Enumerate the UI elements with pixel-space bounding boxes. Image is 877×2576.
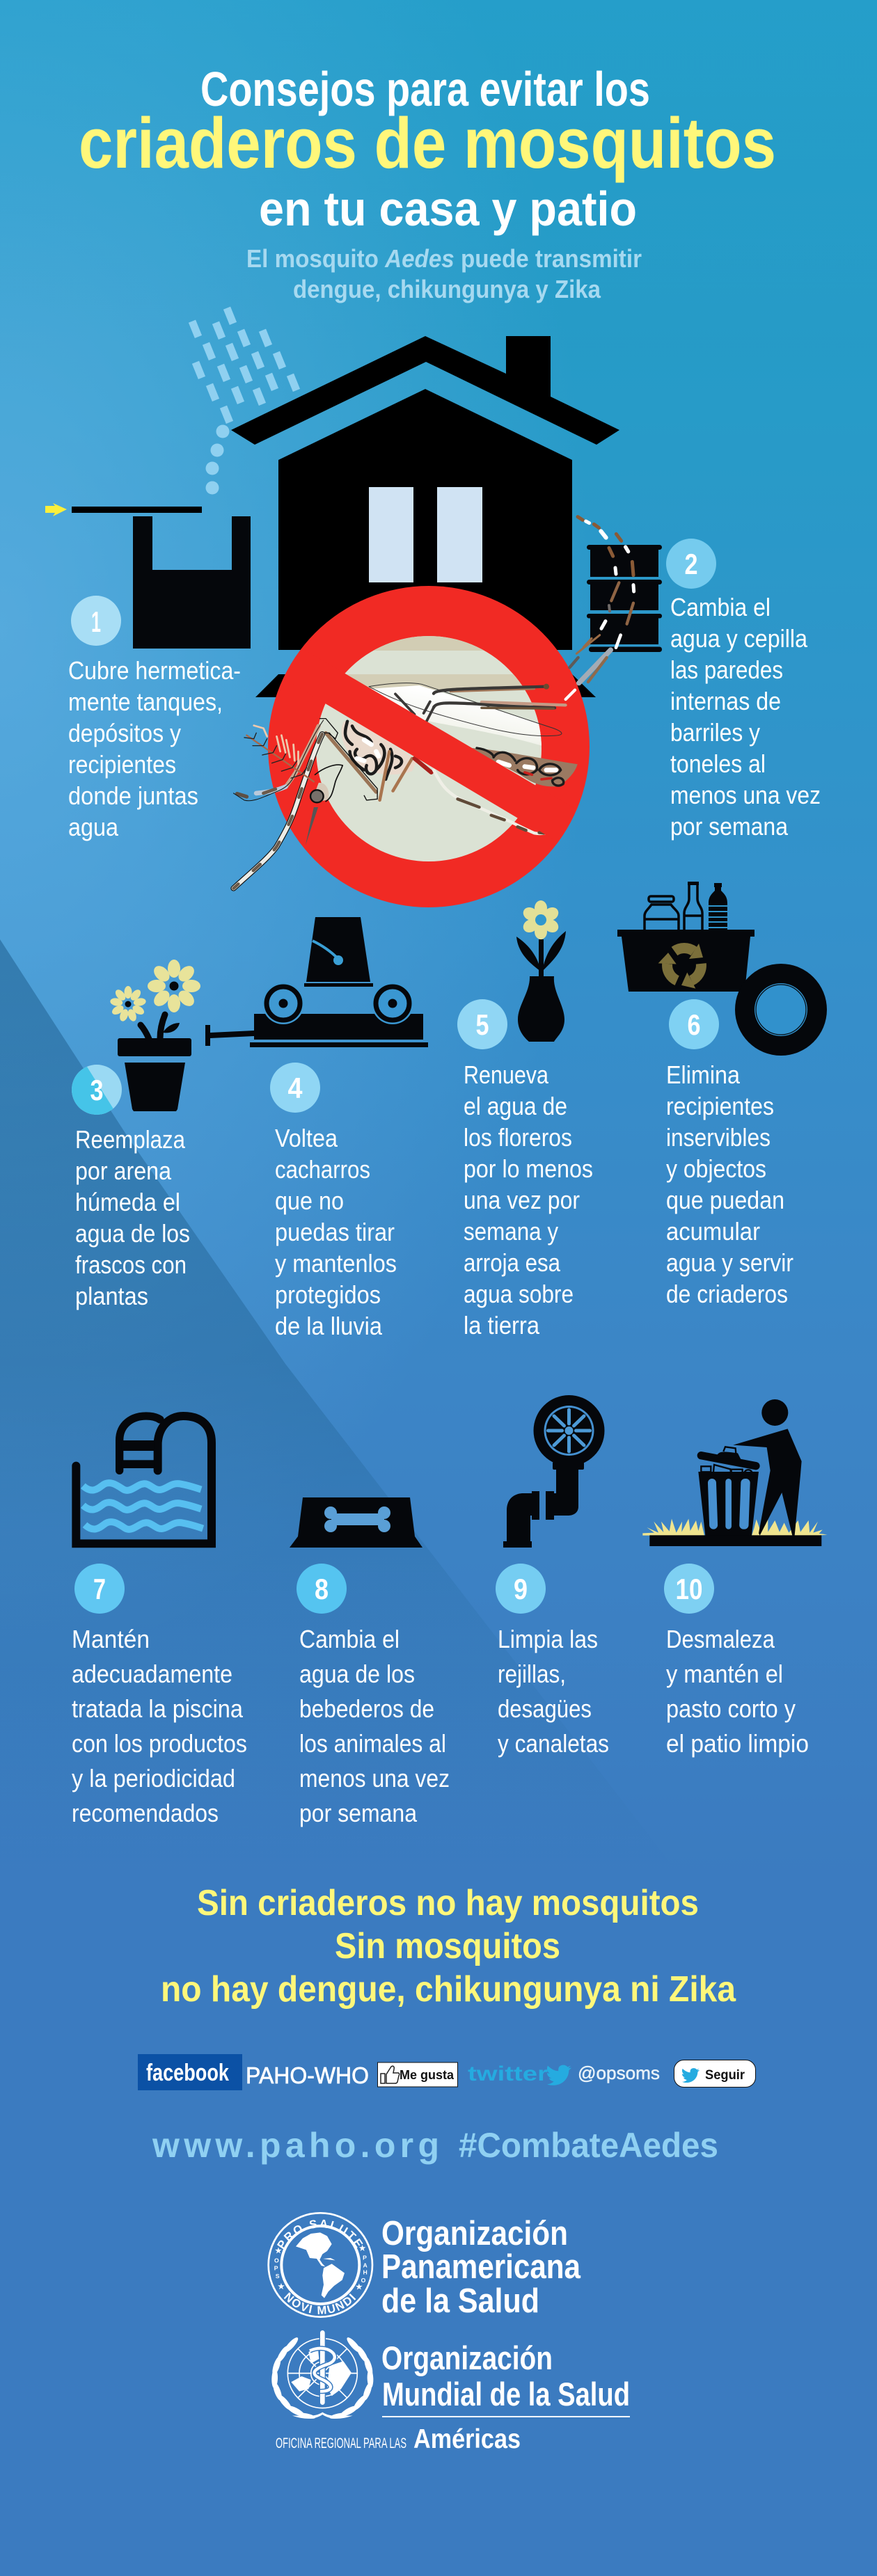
like button: Me gusta	[400, 2068, 455, 2082]
text 7: y la periodicidad	[72, 1764, 235, 1792]
badge 5: 5	[476, 1008, 489, 1041]
icon: flower vase	[516, 900, 566, 1042]
text 6: recipientes	[666, 1092, 774, 1120]
text 4	[275, 1124, 397, 1340]
text 7: con los productos	[72, 1729, 247, 1758]
follow button	[674, 2060, 756, 2088]
icon: barrel	[587, 545, 662, 652]
badge 3	[72, 1065, 122, 1115]
logo: PAHO emblem: PRO SALUTE	[277, 2220, 363, 2249]
logo: PAHO emblem: O	[361, 2277, 366, 2284]
title	[79, 62, 776, 236]
text 8: bebederos de	[299, 1694, 434, 1723]
step 6	[666, 999, 793, 1308]
step 9	[496, 1564, 609, 1758]
text 3	[75, 1125, 190, 1310]
badge 8: 8	[315, 1573, 329, 1605]
text 3: agua de los	[75, 1219, 190, 1248]
logo: PAHO emblem: H	[363, 2269, 368, 2276]
logo: WHO name: Organización	[381, 2339, 553, 2376]
text 4: de la lluvia	[275, 1312, 383, 1340]
text 3: frascos con	[75, 1250, 187, 1279]
text 10: Desmaleza	[666, 1625, 775, 1653]
icon: prohibition sign with mosquito	[233, 586, 590, 907]
text 4: y mantenlos	[275, 1249, 397, 1278]
facebook badge: facebook	[146, 2060, 229, 2086]
mosquito legs over barrel	[566, 517, 634, 699]
logo: WHO name: OFICINA REGIONAL PARA LAS	[276, 2435, 406, 2451]
step 10	[664, 1564, 809, 1758]
text 7: Mantén	[72, 1625, 150, 1653]
badge 6	[669, 999, 719, 1049]
text 5: semana y	[464, 1217, 558, 1246]
text 5: por lo menos	[464, 1154, 593, 1183]
text 3: Reemplaza	[75, 1125, 186, 1154]
icon: pet water bowl	[290, 1497, 422, 1548]
twitter account: @opsoms	[578, 2062, 660, 2083]
badge 1: 1	[91, 605, 101, 638]
title: Consejos para evitar los	[200, 62, 650, 116]
closing slogan	[161, 1883, 736, 2010]
logo: PAHO name: de la Salud	[381, 2282, 539, 2320]
text 5	[464, 1060, 593, 1339]
text 7	[72, 1625, 247, 1827]
text 6: acumular	[666, 1217, 760, 1246]
badge 2: 2	[685, 548, 697, 580]
badge 7	[74, 1564, 125, 1614]
text 8: por semana	[299, 1799, 418, 1827]
website and hashtag	[152, 2126, 718, 2165]
text 2: internas de	[670, 687, 781, 715]
logo: PAHO emblem: ★	[358, 2243, 366, 2253]
logo: PAHO emblem: ★	[355, 2282, 363, 2292]
text 4: cacharros	[275, 1155, 370, 1184]
text 4: que no	[275, 1186, 344, 1215]
badge 8	[297, 1564, 347, 1614]
badge 3: 3	[90, 1074, 103, 1106]
social media row	[138, 2054, 756, 2090]
icon: house	[231, 336, 619, 697]
text 2: menos una vez	[670, 781, 821, 809]
badge 2	[666, 539, 716, 589]
subtitle	[246, 244, 642, 303]
step 2	[666, 539, 821, 841]
logo: WHO name: Américas	[413, 2424, 521, 2454]
logo: PAHO name: Panamericana	[381, 2248, 581, 2286]
text 5: Renueva	[464, 1060, 549, 1089]
text 6	[666, 1060, 793, 1308]
text 6: agua y servir	[666, 1248, 793, 1277]
logo: PAHO emblem: P	[274, 2265, 278, 2272]
logo: PAHO emblem: O	[274, 2257, 279, 2264]
text 8: menos una vez	[299, 1764, 450, 1792]
icon: drain pipe with grate	[503, 1395, 604, 1548]
text 1: donde juntas	[68, 781, 198, 810]
text 10: el patio limpio	[666, 1729, 809, 1758]
text 6: que puedan	[666, 1186, 784, 1214]
logo: PAHO name	[381, 2215, 581, 2320]
text 8	[299, 1625, 450, 1827]
text 4: protegidos	[275, 1280, 381, 1309]
logo: PAHO name: Organización	[381, 2215, 568, 2252]
twitter logo	[468, 2062, 571, 2085]
text 4: puedas tirar	[275, 1218, 395, 1246]
step 5	[457, 999, 593, 1339]
text 1: recipientes	[68, 750, 176, 779]
facebook badge	[138, 2054, 242, 2090]
icon: swimming pool	[76, 1416, 212, 1543]
logo: WHO emblem	[271, 2330, 374, 2420]
text 3: plantas	[75, 1282, 148, 1310]
title: criaderos de mosquitos	[79, 103, 776, 183]
follow button: Seguir	[705, 2068, 745, 2083]
icon: person using trash can on grass	[642, 1399, 828, 1546]
text 3: por arena	[75, 1156, 172, 1185]
text 6: inservibles	[666, 1123, 771, 1152]
text 5: los floreros	[464, 1123, 572, 1152]
icon: overturned bucket on cart	[205, 917, 428, 1047]
text 5: una vez por	[464, 1186, 580, 1214]
title: en tu casa y patio	[259, 182, 637, 236]
logo: PAHO emblem	[267, 2212, 373, 2318]
badge 9: 9	[514, 1573, 528, 1605]
text 5: arroja esa	[464, 1248, 561, 1277]
text 2: por semana	[670, 812, 789, 841]
text 1	[68, 656, 241, 841]
text 5: agua sobre	[464, 1280, 574, 1308]
logo: PAHO emblem: A	[363, 2261, 368, 2268]
text 9: y canaletas	[498, 1729, 609, 1758]
badge 6: 6	[688, 1008, 700, 1041]
text 2: agua y cepilla	[670, 624, 808, 653]
badge 4: 4	[288, 1072, 303, 1104]
closing slogan: Sin mosquitos	[335, 1926, 560, 1966]
text 2: toneles al	[670, 749, 766, 778]
icon: recycling basket, bottles and tire	[617, 882, 827, 1056]
closing slogan: Sin criaderos no hay mosquitos	[197, 1883, 699, 1923]
text 1: depósitos y	[68, 719, 181, 747]
badge 1	[71, 596, 121, 646]
text 9: rejillas,	[498, 1660, 566, 1688]
text 5: la tierra	[464, 1311, 540, 1339]
text 5: el agua de	[464, 1092, 567, 1120]
subtitle: dengue, chikungunya y Zika	[293, 275, 601, 303]
text 7: tratada la piscina	[72, 1694, 244, 1723]
text 1: agua	[68, 813, 119, 841]
text 2: las paredes	[670, 655, 783, 684]
text 6: de criaderos	[666, 1280, 788, 1308]
text 7: adecuadamente	[72, 1660, 232, 1688]
logo: WHO name	[276, 2339, 630, 2454]
facebook account: PAHO-WHO	[246, 2062, 369, 2088]
logo: PAHO emblem: NOVI MUNDI	[284, 2292, 356, 2314]
text 10	[666, 1625, 809, 1758]
text 2	[670, 593, 821, 841]
logo: PAHO emblem: ★	[274, 2245, 283, 2255]
icon: rain falling from roof	[189, 307, 300, 494]
text 2: barriles y	[670, 718, 760, 747]
badge 5	[457, 999, 507, 1049]
mosquito legs, head and antenna	[233, 719, 377, 889]
subtitle: El mosquito Aedes puede transmitir	[246, 244, 642, 273]
text 10: y mantén el	[666, 1660, 783, 1688]
text 6: Elimina	[666, 1060, 741, 1089]
text 7: recomendados	[72, 1799, 219, 1827]
text 1: Cubre hermetica-	[68, 656, 241, 685]
text 1: mente tanques,	[68, 687, 223, 716]
step 7	[72, 1564, 247, 1827]
step 4	[270, 1063, 397, 1340]
mosquito body	[345, 683, 578, 834]
step 8	[297, 1564, 450, 1827]
text 6: y objectos	[666, 1154, 766, 1183]
badge 9	[496, 1564, 546, 1614]
text 8: los animales al	[299, 1729, 446, 1758]
step 1	[68, 596, 241, 841]
badge 10: 10	[675, 1573, 703, 1605]
icon: flowers in pot	[109, 960, 200, 1111]
text 8: Cambia el	[299, 1625, 400, 1653]
website and hashtag: #CombateAedes	[459, 2126, 718, 2165]
text 4: Voltea	[275, 1124, 338, 1152]
logo: PAHO emblem: ★	[277, 2282, 285, 2291]
badge 4	[270, 1063, 320, 1113]
logo: WHO name: Mundial de la Salud	[382, 2376, 630, 2412]
logo: PAHO emblem: S	[276, 2273, 280, 2280]
text 3: húmeda el	[75, 1188, 180, 1216]
icon: covered tank	[45, 503, 251, 649]
text 9: desagües	[498, 1694, 592, 1723]
text 2: Cambia el	[670, 593, 771, 621]
badge 7: 7	[93, 1573, 106, 1605]
mosquito proboscis	[306, 807, 318, 845]
closing slogan: no hay dengue, chikungunya ni Zika	[161, 1969, 736, 2010]
website and hashtag: www.paho.org	[152, 2126, 439, 2165]
text 9: Limpia las	[498, 1625, 598, 1653]
text 9	[498, 1625, 609, 1758]
twitter logo: twitter	[468, 2062, 548, 2085]
text 8: agua de los	[299, 1660, 415, 1688]
logo: PAHO emblem: P	[363, 2254, 367, 2261]
badge 10	[664, 1564, 714, 1614]
like button	[377, 2062, 458, 2087]
step 3	[72, 1065, 189, 1310]
text 10: pasto corto y	[666, 1694, 796, 1723]
